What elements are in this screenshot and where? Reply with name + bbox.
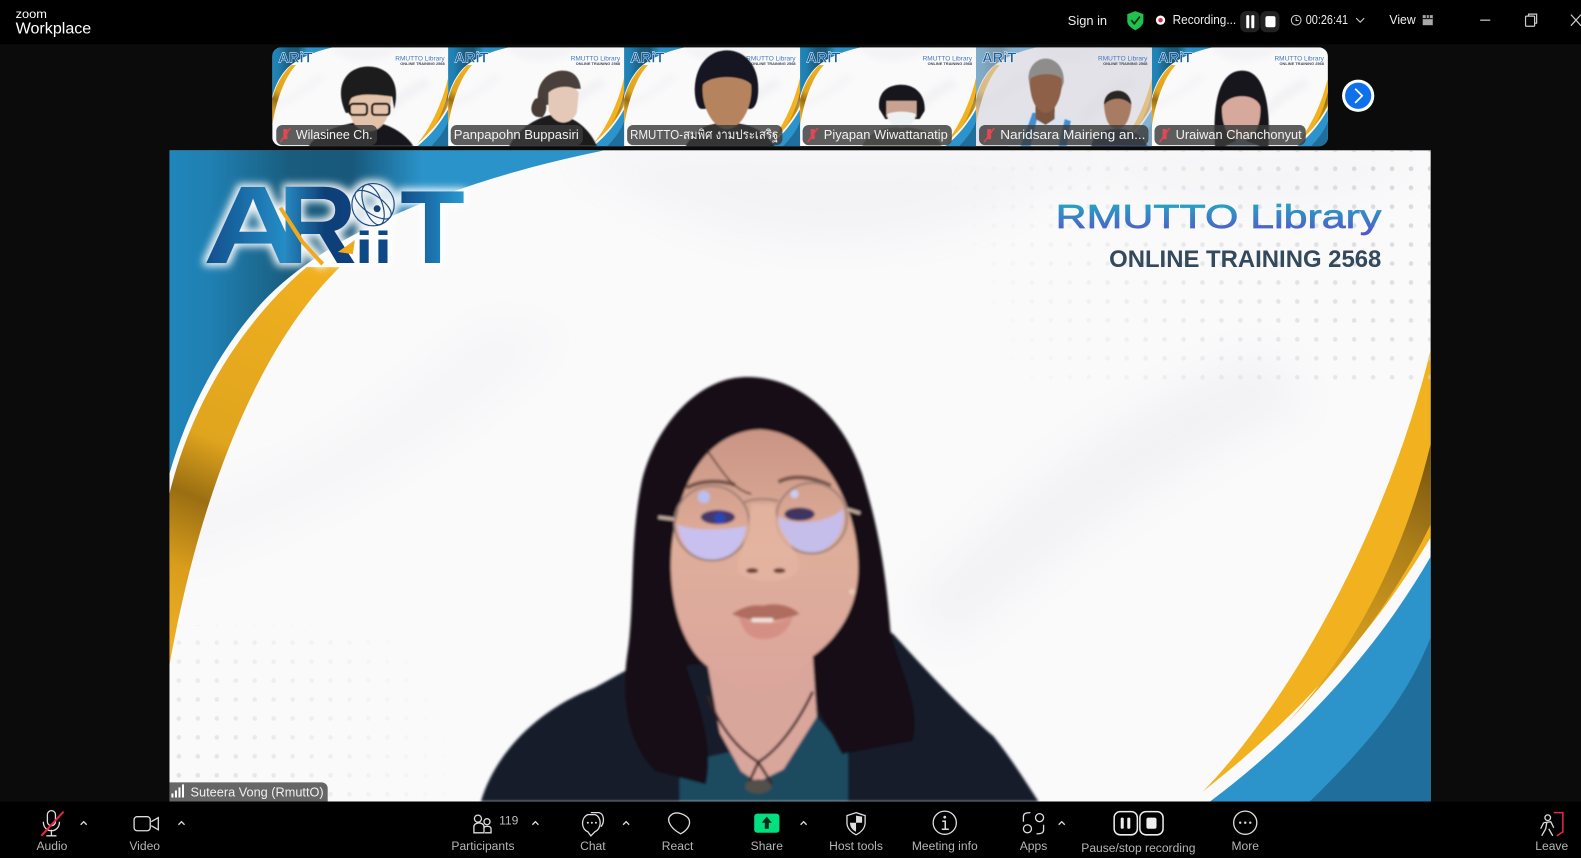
eyes xyxy=(701,510,735,524)
more control: More xyxy=(1231,839,1259,853)
zoom workplace logo: zoom xyxy=(16,9,47,21)
tile: Naridsara Mairieng and participant: ARiT xyxy=(982,51,1016,67)
tile: Piyapan Wiwattanatip xyxy=(800,47,976,146)
nose xyxy=(742,504,793,574)
top title bar xyxy=(0,0,1581,44)
apps control: Apps xyxy=(1020,839,1047,853)
earring xyxy=(849,589,855,595)
tile: Naridsara Mairieng and participant xyxy=(976,47,1152,146)
ARiT logo: A xyxy=(203,163,303,287)
tile: Panpapohn Buppasiri: ARiT xyxy=(454,51,489,67)
view button: View xyxy=(1389,13,1417,27)
react control xyxy=(662,813,694,853)
icon: green security shield xyxy=(1127,11,1143,30)
name label: RMUTTO-สมพิศ งามประเสริฐ: RMUTTO-สมพิศ งามประเสริฐ xyxy=(630,127,778,143)
audio control: Audio xyxy=(36,839,68,853)
window controls xyxy=(1480,14,1581,26)
eyebrows xyxy=(687,477,831,488)
meeting info control: Meeting info xyxy=(912,839,978,853)
presenter name label xyxy=(169,782,328,802)
ARiT logo xyxy=(197,174,470,274)
chat control xyxy=(580,813,629,853)
leave control: Leave xyxy=(1535,839,1568,853)
name label: Piyapan Wiwattanatip: Piyapan Wiwattanatip xyxy=(824,127,948,142)
icon: stop recording xyxy=(1260,11,1280,32)
tile: Naridsara Mairieng and participant: ONLINE TRAINING 2568 xyxy=(1103,61,1148,66)
teal shirt xyxy=(680,717,848,802)
icon: next page arrow button xyxy=(1342,80,1374,112)
zoom workplace logo: Workplace xyxy=(16,19,91,37)
host tools control xyxy=(829,813,883,853)
bottom meeting toolbar xyxy=(0,802,1581,858)
view button xyxy=(1389,13,1433,27)
necklace xyxy=(708,692,813,784)
zoom workplace logo xyxy=(16,9,91,37)
share control xyxy=(751,814,807,853)
name label: Wilasinee Ch. xyxy=(276,125,377,145)
tile: Naridsara Mairieng and participant: RMUTTO Library xyxy=(1098,56,1147,62)
hair strand xyxy=(706,449,751,494)
tile: Piyapan Wiwattanatip: ARiT xyxy=(806,51,840,67)
presenter xyxy=(481,377,1039,802)
audio control xyxy=(36,811,87,853)
name label: Naridsara Mairieng an... xyxy=(979,125,1148,145)
tile: RMUTTO-สมพิศ งามประเสริฐ: RMUTTO Library xyxy=(746,56,796,62)
tile: Piyapan Wiwattanatip: RMUTTO Library xyxy=(923,56,972,62)
cardigan xyxy=(481,633,1039,802)
tile: Uraiwan Chanchonyut xyxy=(1152,47,1328,146)
name label: Wilasinee Ch.: Wilasinee Ch. xyxy=(296,127,373,142)
name label: Panpapohn Buppasiri: Panpapohn Buppasiri xyxy=(454,127,579,142)
tile: Uraiwan Chanchonyut: RMUTTO Library xyxy=(1274,56,1324,62)
icon: recording dot xyxy=(1156,16,1165,25)
tile: Panpapohn Buppasiri: RMUTTO Library xyxy=(571,56,620,62)
tile: Panpapohn Buppasiri: ONLINE TRAINING 2568 xyxy=(576,61,621,66)
host tools control: Host tools xyxy=(829,839,883,853)
recording status text: Recording... xyxy=(1173,13,1236,27)
presenter name label: Suteera Vong (RmuttO) xyxy=(191,785,324,799)
tile: Wilasinee Ch. xyxy=(272,47,448,146)
pendant xyxy=(745,779,771,793)
lens reflections xyxy=(678,524,746,561)
tile: Uraiwan Chanchonyut: ONLINE TRAINING 2568 xyxy=(1280,61,1325,66)
name label: Uraiwan Chanchonyut: Uraiwan Chanchonyut xyxy=(1176,127,1302,142)
hair xyxy=(625,377,915,784)
more control xyxy=(1231,811,1259,853)
pause/stop recording control xyxy=(1081,812,1195,855)
name label: Naridsara Mairieng an...: Naridsara Mairieng an... xyxy=(1000,127,1145,142)
main speaker video with training slide xyxy=(169,150,1431,802)
tile: RMUTTO-สมพิศ งามประเสริฐ: ONLINE TRAINING 2568 xyxy=(751,61,796,66)
tile: RMUTTO-สมพิศ งามประเสริฐ xyxy=(624,47,800,146)
thumbnail strip of participants xyxy=(272,47,1328,146)
slide background and swooshes xyxy=(169,150,1431,802)
name label: Piyapan Wiwattanatip xyxy=(803,125,952,145)
apps control xyxy=(1020,813,1065,853)
mouth xyxy=(732,604,800,639)
ARiT logo: R xyxy=(278,163,357,287)
meeting timer: 00:26:41 xyxy=(1306,13,1348,27)
participants control: Participants xyxy=(451,839,515,853)
tile: Wilasinee Ch.: ONLINE TRAINING 2568 xyxy=(400,61,445,66)
tile: Piyapan Wiwattanatip: ONLINE TRAINING 2568 xyxy=(928,61,973,66)
tile: RMUTTO-สมพิศ งามประเสริฐ: ARiT xyxy=(630,51,665,67)
sign in: Sign in xyxy=(1068,13,1107,28)
icon: pause recording xyxy=(1240,11,1259,32)
icon: chevron xyxy=(1356,18,1364,22)
participants control: 119 xyxy=(499,814,519,828)
react control: React xyxy=(662,839,694,853)
name label: RMUTTO-สมพิศ งามประเสริฐ xyxy=(627,125,782,145)
slide subheading: online training: ONLINE TRAINING 2568 xyxy=(1109,246,1381,273)
video control xyxy=(129,817,185,853)
dotted texture top right xyxy=(1050,150,1431,380)
icon: clock xyxy=(1291,15,1301,25)
participants control xyxy=(451,814,538,853)
glasses xyxy=(658,483,860,561)
tile: Wilasinee Ch.: RMUTTO Library xyxy=(395,56,445,62)
ARiT logo: T xyxy=(400,170,465,286)
tile: Wilasinee Ch.: ARiT xyxy=(278,51,313,67)
ARiT logo: ii xyxy=(355,224,392,273)
name label: Uraiwan Chanchonyut xyxy=(1154,125,1306,145)
pause/stop recording control: Pause/stop recording xyxy=(1081,841,1195,855)
slide heading: RMUTTO Library: RMUTTO Library xyxy=(1056,199,1382,236)
chat control: Chat xyxy=(580,839,606,853)
leave control xyxy=(1535,813,1568,853)
dotted texture bottom left xyxy=(176,625,370,796)
share control: Share xyxy=(751,839,783,853)
video control: Video xyxy=(129,839,160,853)
face xyxy=(671,430,858,692)
tile: Panpapohn Buppasiri xyxy=(448,47,624,146)
neck xyxy=(706,655,817,782)
meeting info control xyxy=(912,811,978,853)
tile: Uraiwan Chanchonyut: ARiT xyxy=(1158,51,1192,67)
